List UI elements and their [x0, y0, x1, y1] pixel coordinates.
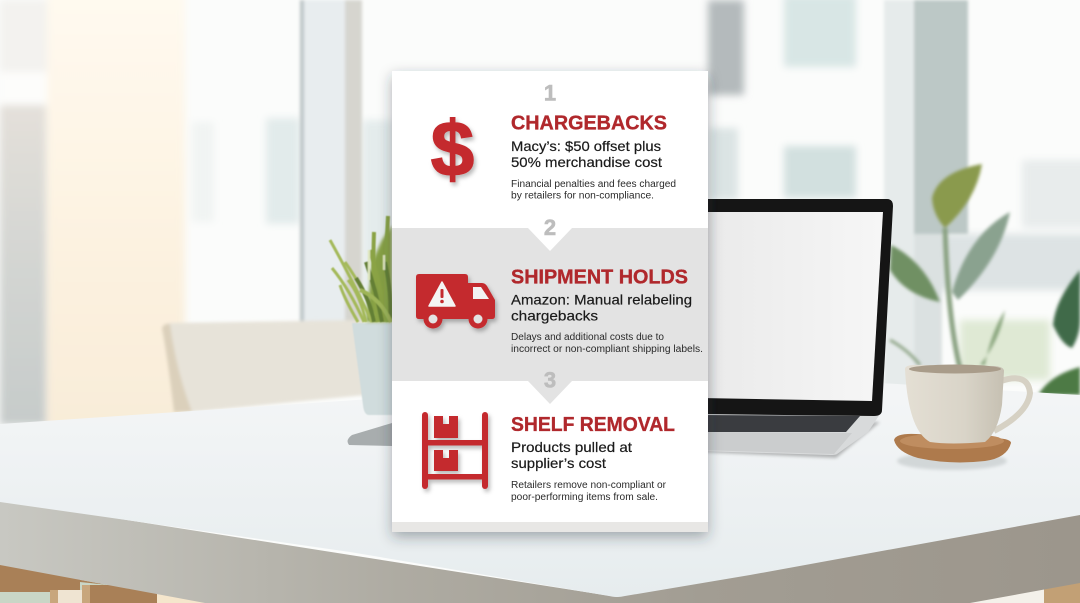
description: Financial penalties and fees charged [511, 179, 676, 190]
footer band [392, 522, 708, 532]
saucer [894, 433, 1011, 462]
description [511, 480, 667, 503]
number 3: 3 [544, 368, 556, 392]
subheading [511, 292, 692, 324]
description: Retailers remove non-compliant or [511, 480, 667, 491]
description: poor-performing items from sale. [511, 492, 658, 503]
table [0, 383, 1080, 603]
right plant [890, 164, 1080, 395]
description: by retailers for non-compliance. [511, 190, 654, 202]
grey band with notch [392, 228, 708, 404]
heading: shipment holds: SHIPMENT HOLDS [511, 266, 688, 288]
icon: shelf with boxes [422, 412, 488, 489]
description [511, 179, 676, 202]
section 3: shelf removal [422, 368, 675, 503]
icon: delivery truck with warning [416, 274, 495, 328]
subheading: Macy’s: $50 offset plus [511, 138, 661, 154]
subheading [511, 439, 632, 471]
coffee cup on saucer [894, 364, 1030, 470]
subheading: 50% merchandise cost [511, 154, 662, 170]
subheading: chargebacks [511, 308, 598, 324]
description [511, 332, 703, 355]
number 2: 2 [544, 215, 556, 240]
infographic card [392, 71, 708, 532]
heading: shelf removal: SHELF REMOVAL [511, 414, 675, 436]
laptop [348, 199, 893, 458]
subheading: Products pulled at [511, 439, 632, 455]
plant pot [330, 216, 394, 415]
description: incorrect or non-compliant shipping labels. [511, 344, 703, 355]
subheading: Amazon: Manual relabeling [511, 292, 692, 308]
section 1: chargebacks [431, 80, 676, 202]
table legs and floor [0, 560, 1080, 603]
icon: dollar sign: $ [431, 104, 474, 192]
section 2: shipment holds [416, 215, 703, 355]
subheading [511, 138, 662, 170]
chair [162, 320, 366, 412]
number 1: 1 [544, 80, 556, 106]
subheading: supplier’s cost [511, 455, 606, 471]
heading: chargebacks: CHARGEBACKS [511, 112, 667, 134]
description: Delays and additional costs due to [511, 332, 664, 343]
